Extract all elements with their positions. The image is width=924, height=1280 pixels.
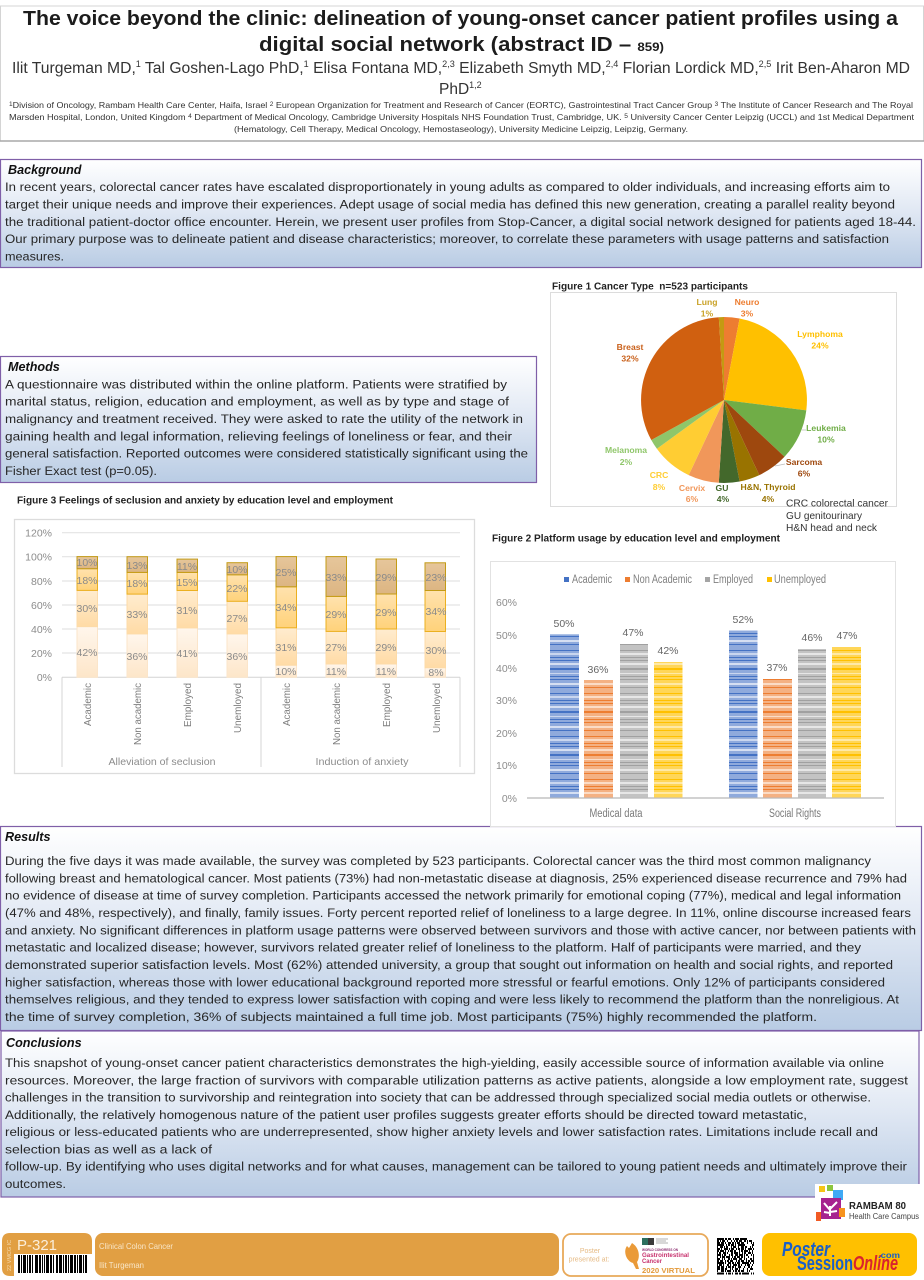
logo: Rambam 80: RAMBAM 80 (849, 1200, 906, 1212)
bars: social rights (729, 614, 861, 820)
stacked bars: alleviation of seclusion: 10% (226, 564, 248, 576)
pie labels: 6% (798, 468, 811, 478)
title: digital social network (abstract ID – 859) (259, 34, 664, 56)
category labels (82, 683, 443, 745)
group labels: Induction of anxiety (316, 756, 409, 768)
congress logo: Gastrointestinal (642, 1253, 689, 1259)
conclusions text: outcomes. (5, 1177, 66, 1191)
pie labels: CRC (650, 470, 668, 480)
pie labels: Lymphoma (797, 329, 843, 339)
pie labels: Leukemia (806, 423, 846, 433)
stacked bars: induction of anxiety: 29% (325, 609, 347, 621)
bars: medical data: 47% (622, 627, 644, 639)
affiliations: 5 (624, 114, 629, 120)
stacked bars: induction of anxiety: 29% (375, 572, 397, 584)
affiliations: Department of Medical Oncology, Cambridge University Hospitals NHS Foundation Trust, Cambridge, UK. (192, 112, 624, 122)
footer: PosterSessionOnline logo: .com (878, 1251, 900, 1260)
presented at text: Poster (580, 1248, 601, 1255)
results text (5, 854, 916, 1024)
methods text: Fisher Exact test (p=0.05). (5, 464, 157, 478)
pie labels (605, 297, 846, 504)
header block (0, 6, 924, 141)
stacked bars: induction of anxiety: 33% (325, 572, 347, 584)
pie labels: 6% (686, 494, 699, 504)
affiliations: University Cancer Center Leipzig (UCCL) and 1st Medical Department (628, 112, 915, 122)
methods text: A questionnaire was distributed within the online platform. Patients were stratified by (5, 378, 508, 392)
authors: Elizabeth Smyth MD, (455, 60, 606, 77)
pie labels: 3% (741, 308, 754, 318)
background text: the traditional patient-doctor office encounter. Herein, we present user profiles from Stop-Cancer, a digital social network designed for patients aged 18-44. (5, 215, 916, 229)
pie labels: 2% (620, 457, 633, 467)
stacked bars: alleviation of seclusion: 10% (76, 557, 98, 569)
category labels: Unemloyed (431, 683, 443, 733)
category: medical data: Medical data (590, 808, 643, 820)
stacked bars: induction of anxiety: 34% (425, 606, 447, 618)
stacked bars: induction of anxiety (275, 557, 447, 679)
legend: Employed (713, 574, 753, 586)
pie labels: 8% (653, 482, 666, 492)
stacked bars: induction of anxiety: 34% (275, 602, 297, 614)
authors: Tal Goshen-Lago PhD, (141, 60, 304, 77)
category labels: Academic (82, 683, 94, 726)
bars: social rights: 47% (836, 630, 858, 642)
legend: Unemployed (774, 574, 826, 586)
stacked bars: alleviation of seclusion: 18% (126, 578, 148, 590)
results text: demonstrated superior satisfaction levels. Most (62%) attended university, a group that sought out information on health and social rights, and reported (5, 958, 893, 972)
barcode (14, 1254, 92, 1276)
y axis: 0% (502, 793, 517, 805)
background text: target their unique needs and improve their experiences. Adept usage of social media has defined this new generation, creating a parallel reality beyond (5, 198, 895, 212)
authors: Irit Ben-Aharon MD (771, 60, 910, 77)
background text: measures. (5, 250, 64, 264)
stacked bars: alleviation of seclusion: 41% (176, 648, 198, 660)
pie labels: GU (716, 483, 728, 493)
figure 2: clustered bar chart (490, 534, 896, 826)
stacked bars: alleviation of seclusion: 13% (126, 560, 148, 572)
bars: medical data: 50% (553, 618, 575, 630)
conclusions text: Additionally, the relatively homogenous nature of the patient user profiles suggests greater efforts should be directed toward metastatic, (5, 1108, 807, 1122)
pie labels: 4% (762, 494, 775, 504)
affiliations: Division of Oncology, Rambam Health Care Center, Haifa, Israel (13, 100, 270, 110)
bars: social rights: 46% (801, 632, 823, 644)
stacked bars: alleviation of seclusion: 36% (226, 651, 248, 663)
bars: medical data: 36% (587, 664, 609, 676)
pie labels: 24% (811, 340, 829, 350)
authors: 1 (304, 59, 309, 69)
affiliations (9, 100, 915, 134)
heading: conclusions: Conclusions (6, 1036, 82, 1050)
abbreviation legend: CRC colorectal cancer (786, 498, 888, 510)
gridlines and y axis: 120% (25, 528, 52, 540)
abbreviation legend (786, 498, 888, 534)
authors: 1,2 (469, 80, 482, 90)
category labels: Non academic (331, 683, 343, 745)
background text: In recent years, colorectal cancer rates have escalated disproportionately in young adults as compared to older individuals, and increasing efforts aim to (5, 180, 890, 194)
results text: no evidence of disease at time of survey completion. Participants accessed the network primarily for emotional coping (77%), medical and legal information (5, 889, 901, 903)
group labels: Alleviation of seclusion (108, 756, 216, 768)
stacked bars: alleviation of seclusion: 18% (76, 575, 98, 587)
affiliations: 3 (715, 102, 719, 108)
rotated code: 22 VMCG IC (7, 1240, 13, 1271)
pie labels: Breast (617, 342, 644, 352)
conclusions text: resources. Moreover, the large fraction of survivors with comparable utilization patterns as active patients, alongside a low employment rate, suggest (5, 1073, 909, 1087)
bars: social rights: 37% (766, 662, 788, 674)
conclusions text (5, 1056, 909, 1191)
congress logo (642, 1238, 695, 1275)
authors: PhD (439, 81, 469, 98)
stacked bars: alleviation of seclusion: 42% (76, 647, 98, 659)
gridlines and y axis: 100% (25, 552, 52, 564)
bars: medical data: 42% (657, 645, 679, 657)
title: The voice beyond the clinic: delineation of young-onset cancer patient profiles using a (23, 8, 899, 30)
category labels: Academic (281, 683, 293, 726)
stacked bars: alleviation of seclusion: 27% (226, 613, 248, 625)
stacked bars: induction of anxiety: 10% (275, 666, 297, 678)
presented at text: presented at: (569, 1256, 609, 1264)
stacked bars: alleviation of seclusion: 22% (226, 583, 248, 595)
panel: background (0, 160, 922, 268)
y axis: 40% (496, 663, 517, 675)
category labels: Unemloyed (232, 683, 244, 733)
stacked bars: induction of anxiety: 29% (375, 642, 397, 654)
conclusions text: follow-up. By identifying who uses digital networks and for what causes, management can be tailored to young patient needs and ultimately improve their (5, 1160, 907, 1174)
category labels: Employed (381, 683, 393, 727)
abbreviation legend: H&N head and neck (786, 522, 878, 534)
y axis (496, 597, 884, 805)
affiliations: 4 (188, 114, 192, 120)
figure 3: stacked bar chart (14, 496, 474, 774)
pie labels: Lung (696, 297, 718, 307)
panel: conclusions (1, 1031, 919, 1197)
results text: (47% and 48%, respectively), and finally, family issues. Forty percent reported relief of loneliness to a large degree. In 11%, online discourse increased fears (5, 906, 911, 920)
stacked bars: alleviation of seclusion (76, 557, 248, 677)
conclusions text: challenges in the transition to survivorship and reintegration into society that can be addressed through specialized social media outlets or otherwise. (5, 1090, 871, 1104)
conclusions text: selection bias as well as a lack of (5, 1142, 213, 1156)
legend (564, 574, 826, 586)
pie labels: 4% (717, 494, 730, 504)
footer: session bar (95, 1233, 559, 1276)
abbreviation legend: GU genitourinary (786, 510, 863, 522)
category labels: Non academic (132, 683, 144, 745)
pie labels: Melanoma (605, 445, 647, 455)
stacked bars: alleviation of seclusion: 36% (126, 651, 148, 663)
gridlines and y axis: 60% (31, 600, 52, 612)
logo: Rambam 80: Health Care Campus (849, 1212, 919, 1221)
y axis: 20% (496, 728, 517, 740)
icon: wheat (625, 1243, 639, 1269)
stacked bars: induction of anxiety: 23% (425, 572, 447, 584)
results text: the time of survey completion, 36% of subjects maintained a full time job. Most participants (75%) highly recommended the platform. (5, 1010, 817, 1024)
category labels: Employed (182, 683, 194, 727)
stacked bars: alleviation of seclusion: 33% (126, 609, 148, 621)
authors (12, 59, 910, 98)
stacked bars: alleviation of seclusion: 31% (176, 605, 198, 617)
footer: presented at box (563, 1234, 708, 1276)
stacked bars: alleviation of seclusion: 11% (177, 561, 197, 573)
methods text: gaining health and legal information, relieving feelings of loneliness or fear, and their (5, 430, 512, 444)
footer: PosterSessionOnline logo: Session (797, 1253, 853, 1275)
gridlines and y axis: 20% (31, 648, 52, 660)
panel: methods (0, 356, 536, 482)
poster number: P-321 (17, 1237, 57, 1254)
gridlines and y axis: 0% (37, 672, 52, 684)
legend: Non Academic (633, 574, 692, 586)
results text: higher satisfaction, whereas those with lower educational background reported more stressful or fearful emotions. Only 12% of participants considered (5, 975, 885, 989)
background text: Our primary purpose was to delineate patient and disease characteristics; moreover, to correlate these parameters with usage patterns and satisfaction (5, 232, 889, 246)
title (23, 8, 899, 56)
background text (5, 180, 916, 264)
footer: PosterSessionOnline logo (762, 1233, 917, 1276)
logo: Rambam 80 (815, 1184, 924, 1225)
stacked bars: induction of anxiety: 27% (325, 642, 347, 654)
stacked bars: induction of anxiety: 11% (326, 666, 346, 678)
heading: background: Background (8, 163, 82, 177)
figure 3 title: Figure 3 Feelings of seclusion and anxiety by education level and employment (17, 496, 394, 506)
figure 2 title: Figure 2 Platform usage by education level and employment (492, 534, 781, 544)
bars: social rights: 52% (732, 614, 754, 626)
authors: Florian Lordick MD, (618, 60, 759, 77)
gridlines and y axis: 80% (31, 576, 52, 588)
footer: poster id tab (2, 1233, 92, 1276)
results text: following breast and hematological cancer. Most patients (73%) had non-metastatic disease at diagnosis, 25% experienced disease recurrence and 79% had (5, 871, 907, 885)
pie slices (641, 317, 807, 483)
gridlines and y axis (25, 528, 460, 767)
results text: metastatic and localized disease; however, survivors related greater relief of loneliness to the platform. Half of participants were married, and they (5, 941, 862, 955)
authors: 1 (136, 59, 141, 69)
stacked bars: induction of anxiety: 25% (275, 567, 297, 579)
figure 1 title: Figure 1 Cancer Type n=523 participants (552, 282, 748, 292)
affiliations: European Organization for Treatment and Research of Cancer (EORTC), Gastrointestinal Tract Cancer Group (273, 100, 715, 110)
panel: results (0, 826, 922, 1030)
congress logo: Cancer (642, 1259, 663, 1265)
figure 1: cancer type pie chart (550, 282, 896, 534)
authors: 2,4 (606, 59, 618, 69)
session title: Clinical Colon Cancer (99, 1241, 173, 1251)
y axis: 30% (496, 695, 517, 707)
results text: themselves religious, and they tended to express lower satisfaction with coping and were less likely to recommend the platform than the nonreligious. At (5, 993, 900, 1007)
affiliations: 2 (270, 102, 274, 108)
methods text: malignancy and treatment received. They were asked to rate the utility of the network in (5, 412, 523, 426)
methods text: marital status, religion, education and employment, as well as by type and stage of (5, 394, 510, 408)
authors: 2,3 (442, 59, 455, 69)
conclusions text: religious or less-educated patients who are underrepresented, show higher anxiety levels and lower satisfaction rates. Limitations include recall and (5, 1125, 878, 1139)
group labels (108, 756, 409, 768)
y axis: 60% (496, 597, 517, 609)
stacked bars: induction of anxiety: 11% (376, 666, 396, 678)
stacked bars: alleviation of seclusion: 30% (76, 603, 98, 615)
pie labels: 1% (701, 308, 714, 318)
stacked bars: induction of anxiety: 30% (425, 645, 447, 657)
pie labels: Cervix (679, 483, 705, 493)
gridlines and y axis: 40% (31, 624, 52, 636)
methods text: general satisfaction. Reported outcomes were considered statistically significant using the (5, 446, 528, 460)
authors: 2,5 (759, 59, 771, 69)
pie labels: Neuro (735, 297, 759, 307)
results text: and anxiety. No significant differences in platform usage patterns were observed between survivors and those with active cancer, nor between patients with (5, 923, 916, 937)
congress logo: 2020 VIRTUAL (642, 1266, 695, 1275)
results text: During the five days it was made available, the survey was completed by 523 participants. Colorectal cancer was the third most common malignancy (5, 854, 872, 868)
authors: Ilit Turgeman MD, (12, 60, 134, 77)
presented at text (569, 1248, 609, 1264)
footer: PosterSessionOnline logo: Online (853, 1253, 898, 1275)
bars: medical data (550, 618, 682, 820)
y axis: 10% (496, 760, 517, 772)
affiliations: Marsden Hospital, London, United Kingdom (9, 112, 170, 122)
pie labels: H&N, Thyroid (741, 482, 795, 492)
stacked bars: induction of anxiety: 29% (375, 607, 397, 619)
congress logo: WORLD CONGRESS ON (642, 1248, 678, 1252)
affiliations: 1 (9, 102, 13, 108)
authors: Elisa Fontana MD, (309, 60, 442, 77)
pie labels: 32% (621, 354, 639, 364)
stacked bars: induction of anxiety: 8% (428, 667, 444, 679)
presenter: Ilit Turgeman (99, 1260, 144, 1270)
heading: results: Results (5, 830, 50, 844)
conclusions text: This snapshot of young-onset cancer patient characteristics demonstrates the high-yielding, easily accessible source of information available via online (5, 1056, 884, 1070)
pie labels: 10% (817, 434, 835, 444)
stacked bars: induction of anxiety: 31% (275, 642, 297, 654)
methods text (5, 378, 528, 478)
affiliations: (Hematology, Cell Therapy, Medical Oncology, Hemostaseology), University Medicine Leipzig, Leipzig, Germany. (234, 124, 688, 134)
heading: methods: Methods (8, 360, 60, 374)
footer: QR code (717, 1238, 754, 1275)
stacked bars: alleviation of seclusion: 15% (176, 577, 198, 589)
legend: Academic (572, 574, 612, 586)
y axis: 50% (496, 630, 517, 642)
pie labels: Sarcoma (786, 457, 822, 467)
affiliations: The Institute of Cancer Research and The Royal (718, 100, 913, 110)
category: social rights: Social Rights (769, 808, 821, 820)
footer: PosterSessionOnline logo: Poster (782, 1239, 831, 1261)
